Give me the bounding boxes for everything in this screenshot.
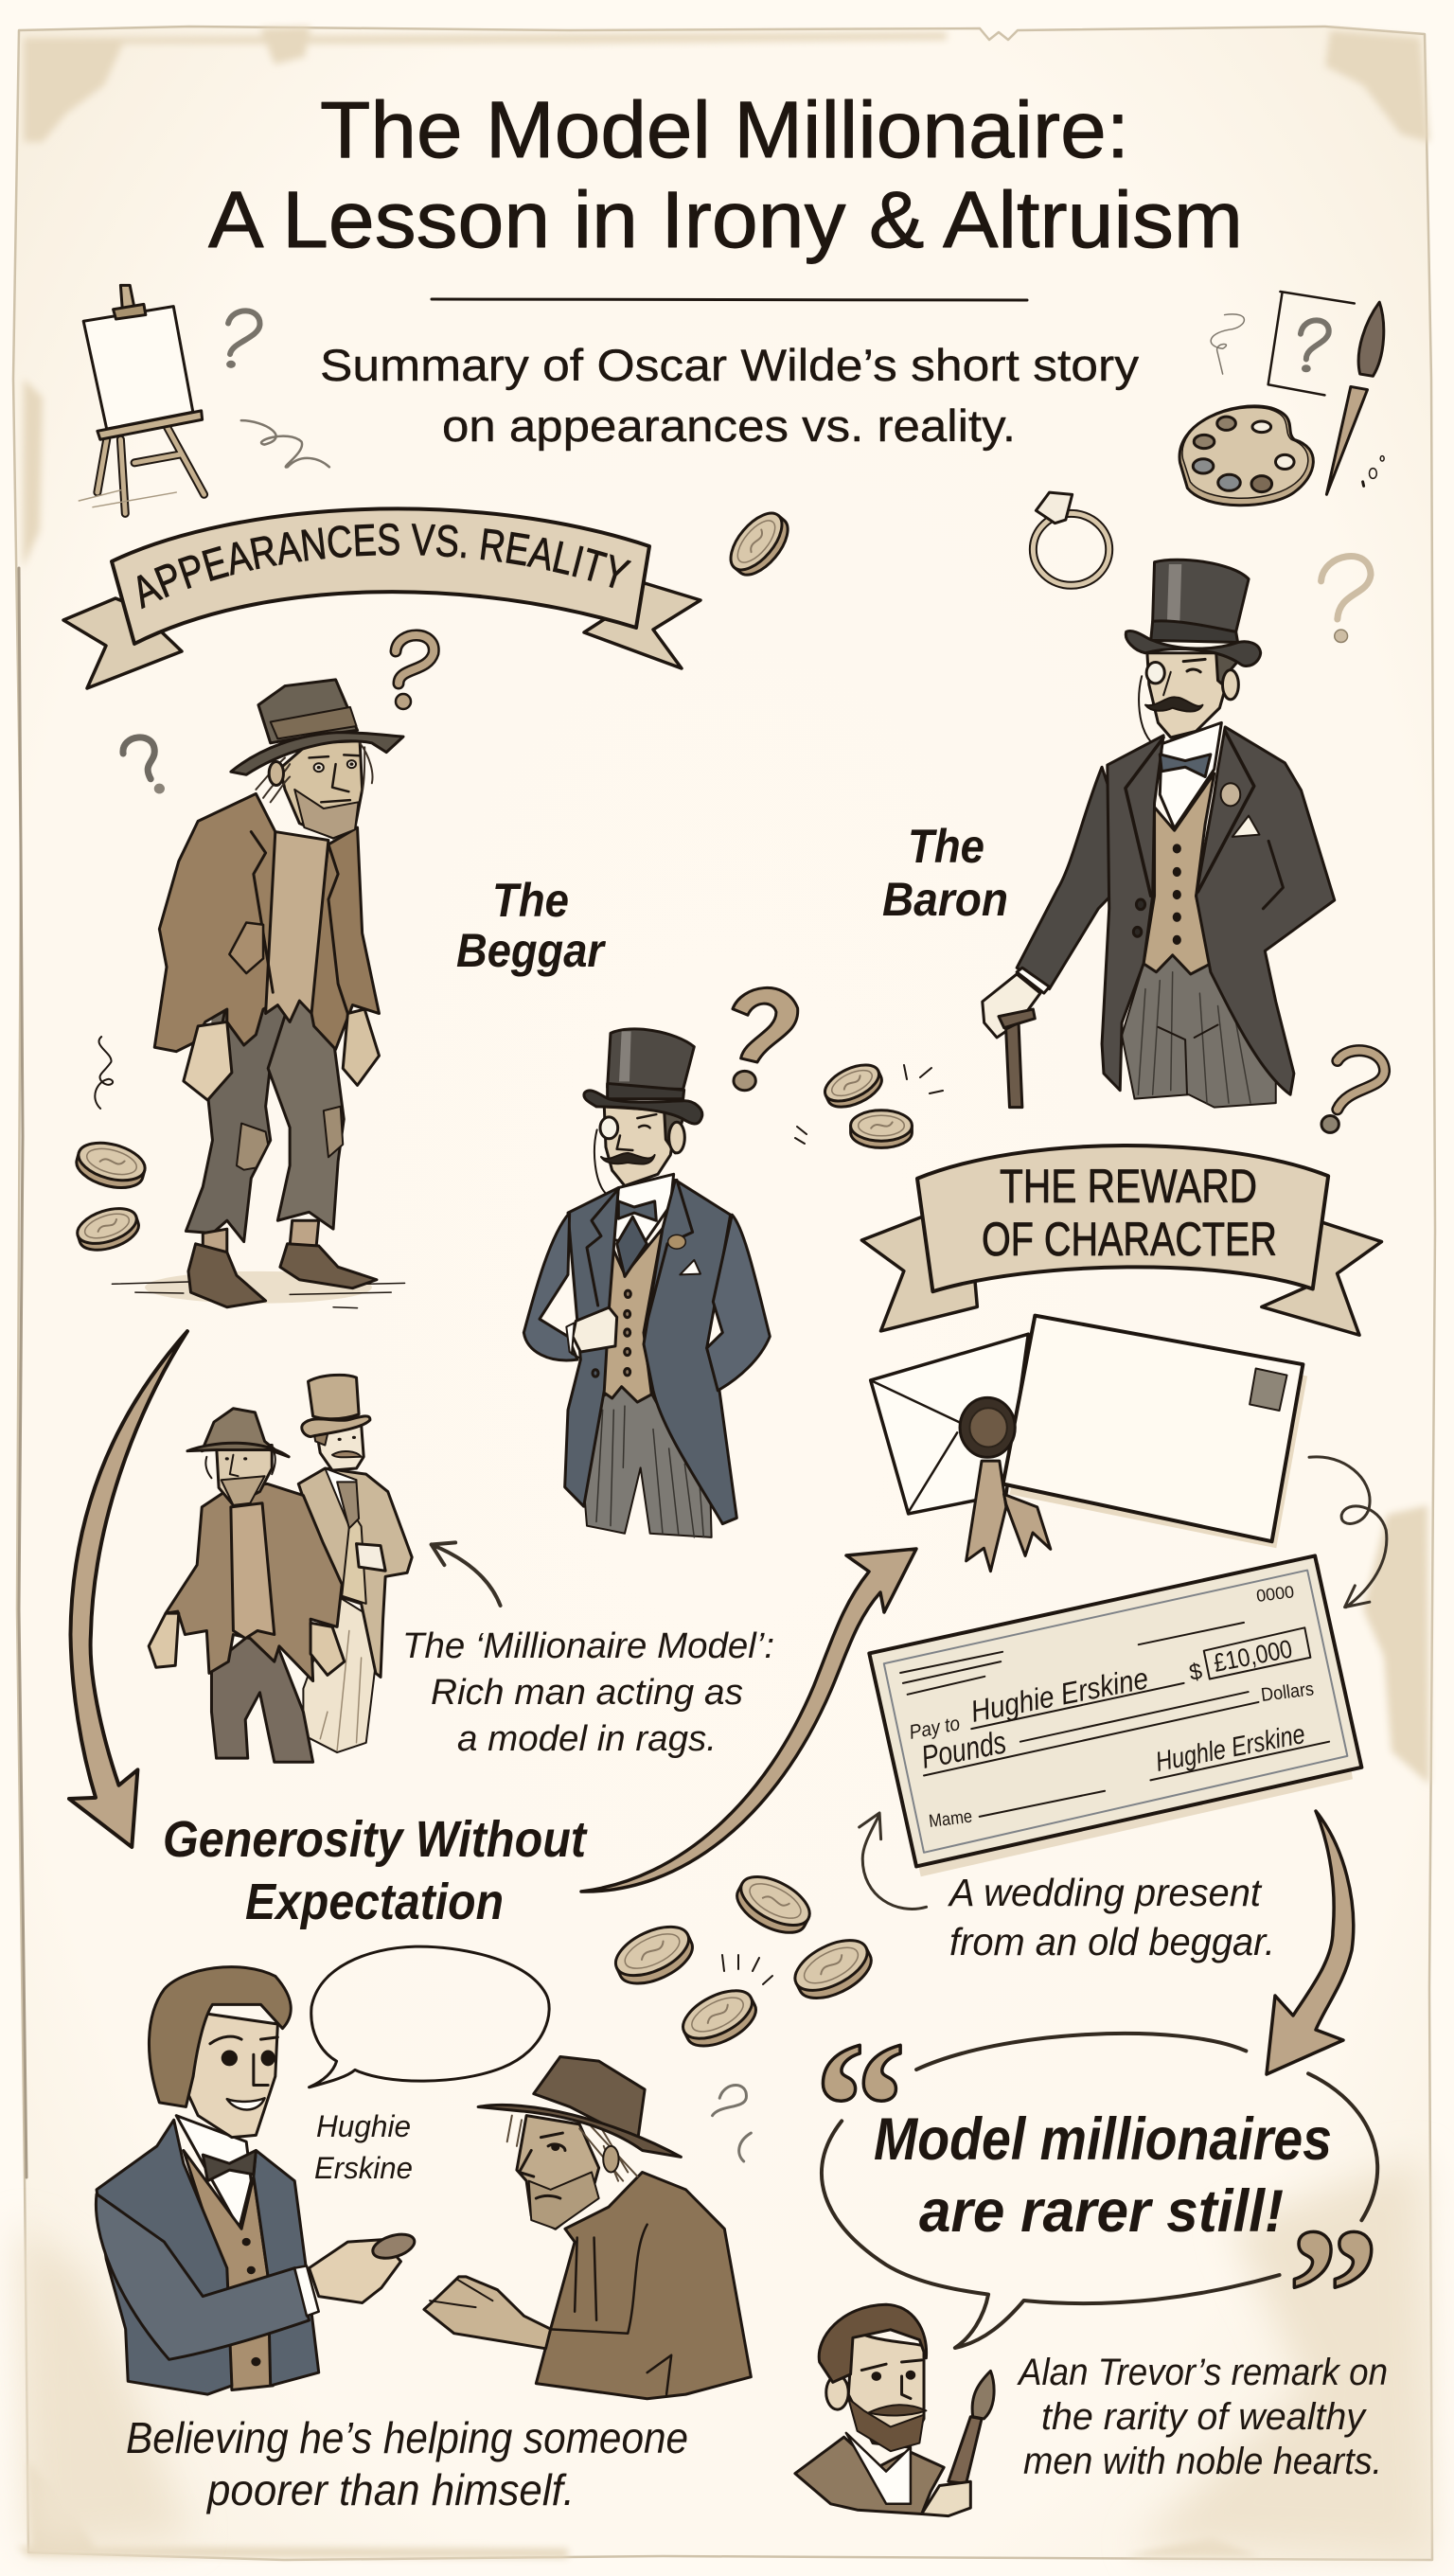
cheque: $ — [1187, 1659, 1204, 1686]
figure: the beggar — [112, 680, 405, 1308]
speech bubble: empty — [310, 1946, 549, 2087]
banner: appearances vs reality — [62, 506, 702, 690]
opening quote mark: “ — [814, 2004, 907, 2209]
curly arrow: envelope to cheque — [1309, 1457, 1387, 1608]
label: the beggar — [456, 874, 606, 977]
label: the beggar: The — [492, 874, 569, 927]
arrow: up to reward — [581, 1549, 916, 1892]
heading: generosity without expectation: Expectation — [245, 1874, 504, 1930]
icon: easel — [79, 285, 204, 513]
heading: generosity without expectation: Generosity Without — [163, 1811, 588, 1868]
label: the baron — [882, 820, 1008, 926]
figure: gentleman in top hat — [523, 1029, 770, 1537]
title: The Model Millionaire: — [320, 85, 1129, 174]
icon: diamond ring — [1033, 492, 1109, 585]
quote text: Model millionaires — [874, 2106, 1332, 2173]
banner: the reward of character: THE REWARD — [1000, 1160, 1257, 1213]
quote text: are rarer still! — [919, 2178, 1284, 2245]
label: hughie erskine — [314, 2109, 413, 2185]
scattered coins — [609, 1867, 878, 2055]
question mark, thin doodle — [713, 2085, 751, 2161]
caption: wedding present: from an old beggar. — [949, 1920, 1275, 1963]
figure: hughie offering coin — [96, 1967, 418, 2394]
cheque: 0000 — [1255, 1582, 1295, 1606]
cheque: £10,000 — [1211, 1634, 1295, 1678]
scribble doodle — [95, 1037, 113, 1109]
figure: alan trevor with brush — [795, 2304, 994, 2516]
icon: palette, paint brush and sketch paper — [1179, 292, 1384, 506]
question mark, lower right of baron — [1321, 1051, 1385, 1132]
banner: the reward of character: OF CHARACTER — [982, 1213, 1277, 1266]
caption: the millionaire model: a model in rags. — [457, 1719, 717, 1759]
banner: appearances vs reality: APPEARANCES VS. REALITY — [137, 523, 631, 610]
subtitle: Summary of Oscar Wilde’s short story — [320, 340, 1140, 390]
label: hughie erskine: Erskine — [314, 2151, 413, 2185]
title: A Lesson in Irony & Altruism — [208, 175, 1243, 264]
question mark near beggar — [396, 635, 434, 709]
question mark, grey — [226, 311, 259, 368]
arrow: down to generosity — [69, 1331, 187, 1847]
scribble doodle — [241, 420, 329, 467]
cheque: Hughie Erskine — [967, 1661, 1151, 1729]
caption: alan trevor remark: the rarity of wealthy — [1041, 2396, 1368, 2438]
caption: believing he is helping — [126, 2413, 688, 2514]
subtitle: on appearances vs. reality. — [442, 400, 1016, 451]
caption: the millionaire model — [402, 1626, 774, 1759]
quote text — [874, 2106, 1332, 2245]
banner: the reward of character — [861, 1146, 1382, 1335]
caption: wedding present — [947, 1871, 1275, 1963]
figure: old beggar receiving coin — [424, 2057, 751, 2399]
label: the baron: The — [908, 820, 984, 873]
label: the baron: Baron — [882, 873, 1008, 926]
subtitle — [320, 340, 1140, 451]
figure: beggar and millionaire model pair — [149, 1375, 501, 1762]
cheque: Hughle Erskine — [1153, 1719, 1307, 1778]
caption: wedding present: A wedding present — [947, 1871, 1263, 1914]
arrow: down to quote — [1267, 1811, 1354, 2074]
caption: alan trevor remark: Alan Trevor’s remark on — [1017, 2352, 1388, 2393]
caption: believing he is helping: poorer than himself. — [205, 2465, 575, 2514]
title — [208, 85, 1243, 264]
cheque: Pay to — [908, 1713, 962, 1744]
closing quote mark: ” — [1287, 2191, 1380, 2395]
curly arrow: cheque caption — [860, 1813, 927, 1909]
caption: alan trevor remark: men with noble hearts. — [1023, 2441, 1382, 2482]
label: the beggar: Beggar — [456, 924, 606, 977]
envelope with wax seal — [871, 1316, 1307, 1572]
coins with sparkle — [795, 1057, 943, 1147]
caption: alan trevor remark — [1017, 2352, 1388, 2482]
caption: the millionaire model: The ‘Millionaire Model’: — [402, 1626, 774, 1666]
label: hughie erskine: Hughie — [316, 2109, 411, 2143]
cheque — [869, 1555, 1361, 1876]
cheque: Dollars — [1260, 1679, 1315, 1706]
question mark, large centre — [733, 987, 798, 1091]
figure: the baron — [983, 560, 1335, 1108]
quote bubble — [814, 2004, 1380, 2395]
caption: the millionaire model: Rich man acting as — [431, 1673, 743, 1713]
question mark, grey left — [123, 737, 165, 793]
cheque: Mame — [928, 1807, 973, 1832]
coin — [721, 505, 797, 583]
coins left — [72, 1136, 149, 1256]
caption: believing he is helping: Believing he’s helping someone — [126, 2413, 688, 2462]
heading: generosity without expectation — [163, 1811, 588, 1930]
cheque: Pounds — [918, 1724, 1009, 1776]
question mark, light — [1321, 557, 1371, 643]
